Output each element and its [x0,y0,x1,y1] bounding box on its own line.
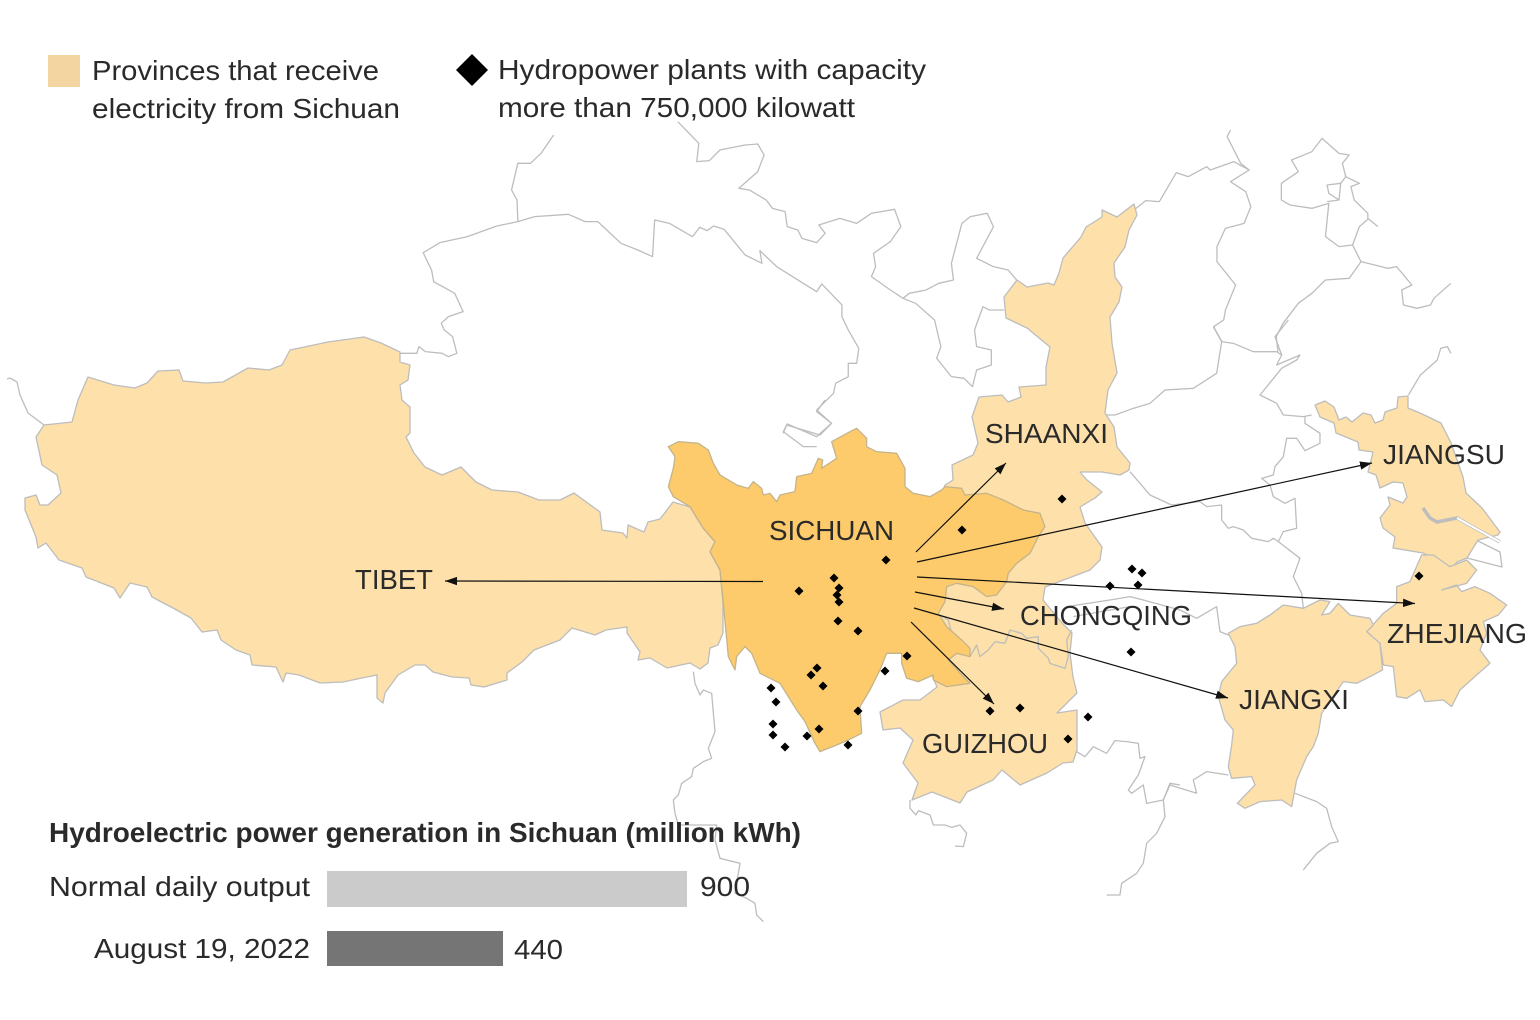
line: Yangtze river through Jiangsu [1423,508,1500,542]
value: 900: 900 [700,871,750,902]
province: Jiangsu [1315,396,1500,568]
label: Jiangsu: JIANGSU [1383,439,1505,470]
row label: normal daily output: Normal daily output [49,871,310,902]
label: Chongqing: CHONGQING [1020,600,1192,631]
arrow to Zhejiang [917,577,1415,604]
map: neighbouring province outlines [400,122,1502,922]
legend [48,54,926,124]
arrow to Shaanxi [916,463,1006,552]
province: Jiangxi [1218,600,1383,808]
province: Shaanxi, Chongqing and Guizhou [880,204,1137,803]
line: Shanghai outline [1467,541,1502,567]
bar: normal daily output [327,871,687,907]
arrow to Jiangsu [917,463,1372,562]
label: Shaanxi: SHAANXI [985,418,1108,449]
province: Zhejiang [1367,555,1507,707]
province: Tibet [25,337,723,703]
arrows from Sichuan [445,463,1415,704]
legend text: hydropower plants: more than 750,000 kilowatt [498,92,855,123]
value: 440: 440 [514,934,563,965]
province labels [355,418,1527,759]
arrow to Guizhou [911,622,994,704]
line: Tibet western border spur [7,378,44,425]
legend text: receiving provinces: electricity from Sichuan [92,93,400,124]
label: Sichuan: SICHUAN [769,515,894,546]
label: Zhejiang: ZHEJIANG [1387,618,1527,649]
hydropower plant markers [766,494,1424,752]
lines: Chongqing internal borders [937,593,1130,668]
label: Tibet: TIBET [355,564,433,595]
legend text: hydropower plants: Hydropower plants with capacity [498,54,926,85]
legend swatch: receiving provinces [48,55,80,87]
label: Jiangxi: JIANGXI [1239,684,1349,715]
arrow to Jiangxi [914,608,1228,698]
province: Sichuan [668,428,1045,752]
arrow to Tibet [445,580,763,582]
label: Guizhou: GUIZHOU [922,728,1048,759]
row label: August 19, 2022: August 19, 2022 [94,933,310,964]
arrow to Chongqing [915,592,1004,609]
chart title: Hydroelectric power generation in Sichuan (million kWh) [49,817,801,848]
legend icon: diamond [456,54,488,86]
bar chart: hydroelectric generation [49,817,801,966]
legend text: receiving provinces: Provinces that receive [92,55,379,86]
bar: August 19, 2022 [327,931,503,966]
